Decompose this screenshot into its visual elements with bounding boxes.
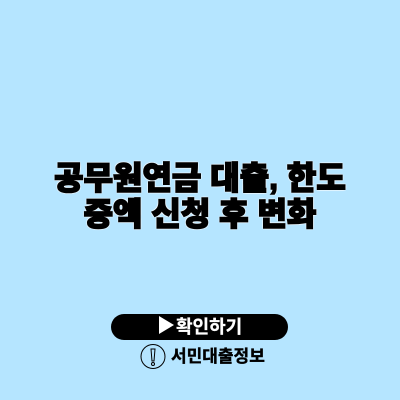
brand name: 서민대출정보: [171, 347, 265, 366]
title: 공무원연금 대출, 한도: [54, 160, 346, 196]
icon: play triangle: [159, 316, 174, 334]
button: confirm: [111, 314, 288, 340]
title: [54, 160, 346, 232]
brand logo: [140, 344, 265, 369]
title: 증액 신청 후 변화: [84, 196, 316, 232]
icon: exclamation circle: [140, 344, 166, 369]
button label: 확인하기: [176, 317, 242, 337]
